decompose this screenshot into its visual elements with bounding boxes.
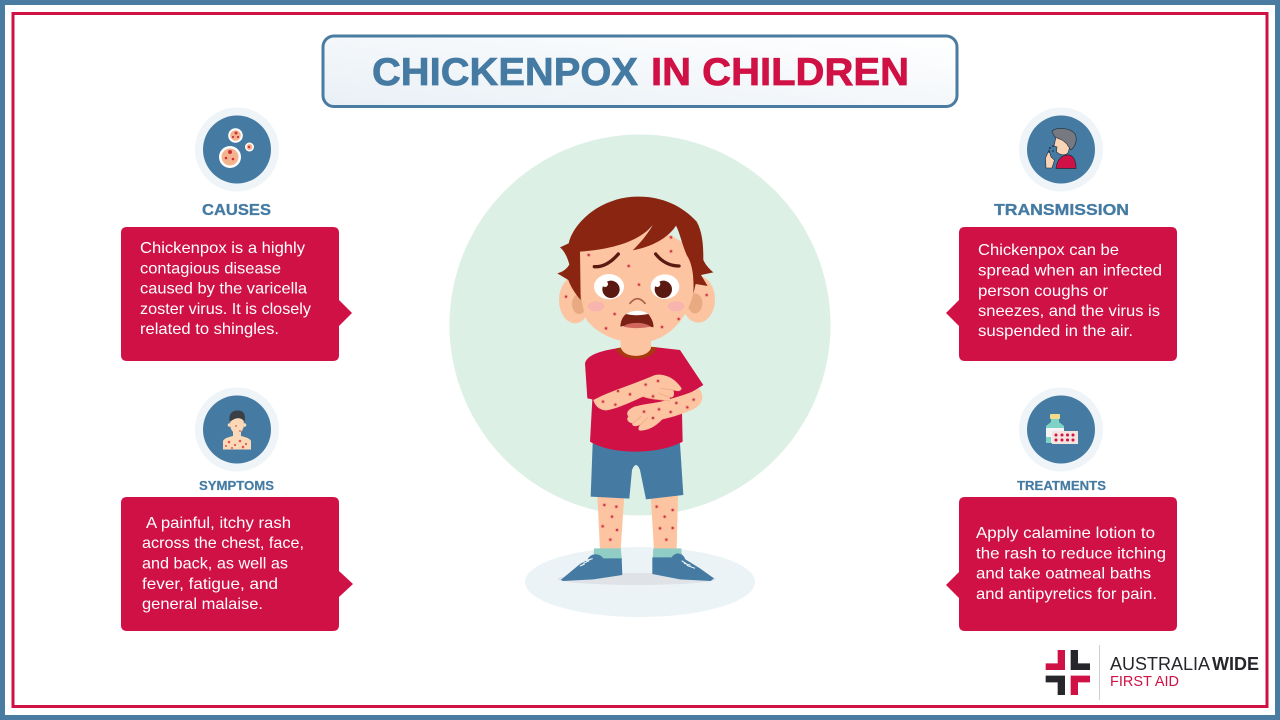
callout: symptoms: A painful, itchy rash xyxy=(146,515,291,532)
child: head and face xyxy=(557,197,715,343)
callout: causes xyxy=(121,227,352,361)
icon: skin blisters xyxy=(195,108,279,192)
callout: causes: caused by the varicella xyxy=(140,280,307,298)
callout: transmission: suspended in the air. xyxy=(978,323,1133,340)
callout: transmission xyxy=(946,227,1177,361)
callout: symptoms xyxy=(121,497,353,631)
callout: symptoms: general malaise. xyxy=(142,596,263,613)
icon: person coughing xyxy=(1019,108,1103,192)
callout: causes: contagious disease xyxy=(140,260,281,278)
child: torso and crossed arms xyxy=(585,336,703,452)
panel: symptoms xyxy=(121,388,353,631)
logo: Australia Wide First Aid: WIDE xyxy=(1212,654,1259,674)
heading: treatments: TREATMENTS xyxy=(1017,479,1106,493)
title: CHICKENPOX xyxy=(372,51,638,94)
logo: Australia Wide First Aid xyxy=(1046,645,1259,700)
callout: transmission: Chickenpox can be xyxy=(978,242,1119,259)
callout: treatments: Apply calamine lotion to xyxy=(976,525,1155,542)
title: IN CHILDREN xyxy=(651,51,909,94)
callout: causes: related to shingles. xyxy=(140,321,279,338)
icon: medicine bottle and pills xyxy=(1019,388,1103,472)
heading: causes: CAUSES xyxy=(202,202,271,219)
callout: transmission: person coughs or xyxy=(978,283,1109,300)
panel: transmission xyxy=(946,108,1177,361)
heading: transmission: TRANSMISSION xyxy=(994,202,1129,219)
logo: Australia Wide First Aid: AUSTRALIA xyxy=(1110,654,1210,674)
illustration: child with chickenpox xyxy=(557,197,716,585)
title xyxy=(323,36,957,106)
callout: transmission: spread when an infected xyxy=(978,262,1162,280)
callout: symptoms: fever, fatigue, and xyxy=(142,576,278,593)
logo: Australia Wide First Aid: FIRST AID xyxy=(1110,673,1179,690)
callout: transmission: sneezes, and the virus is xyxy=(978,303,1160,320)
heading: symptoms: SYMPTOMS xyxy=(199,479,274,493)
callout: treatments: and antipyretics for pain. xyxy=(976,586,1157,603)
illustration: ground ellipse xyxy=(525,547,755,617)
child: legs, shorts and shoes xyxy=(557,443,716,585)
callout: symptoms: across the chest, face, xyxy=(142,535,304,552)
icon: logo cross xyxy=(1046,650,1090,695)
callout: causes: Chickenpox is a highly xyxy=(140,240,305,257)
callout: causes: zoster virus. It is closely xyxy=(140,301,311,318)
callout: treatments: and take oatmeal baths xyxy=(976,566,1151,582)
callout: symptoms: and back, as well as xyxy=(142,556,288,572)
callout: treatments xyxy=(946,497,1177,631)
panel: treatments xyxy=(946,388,1177,631)
illustration: mint background circle xyxy=(450,134,830,516)
icon: person with rash xyxy=(195,388,279,472)
panel: causes xyxy=(121,108,352,361)
callout: treatments: the rash to reduce itching xyxy=(976,546,1166,562)
